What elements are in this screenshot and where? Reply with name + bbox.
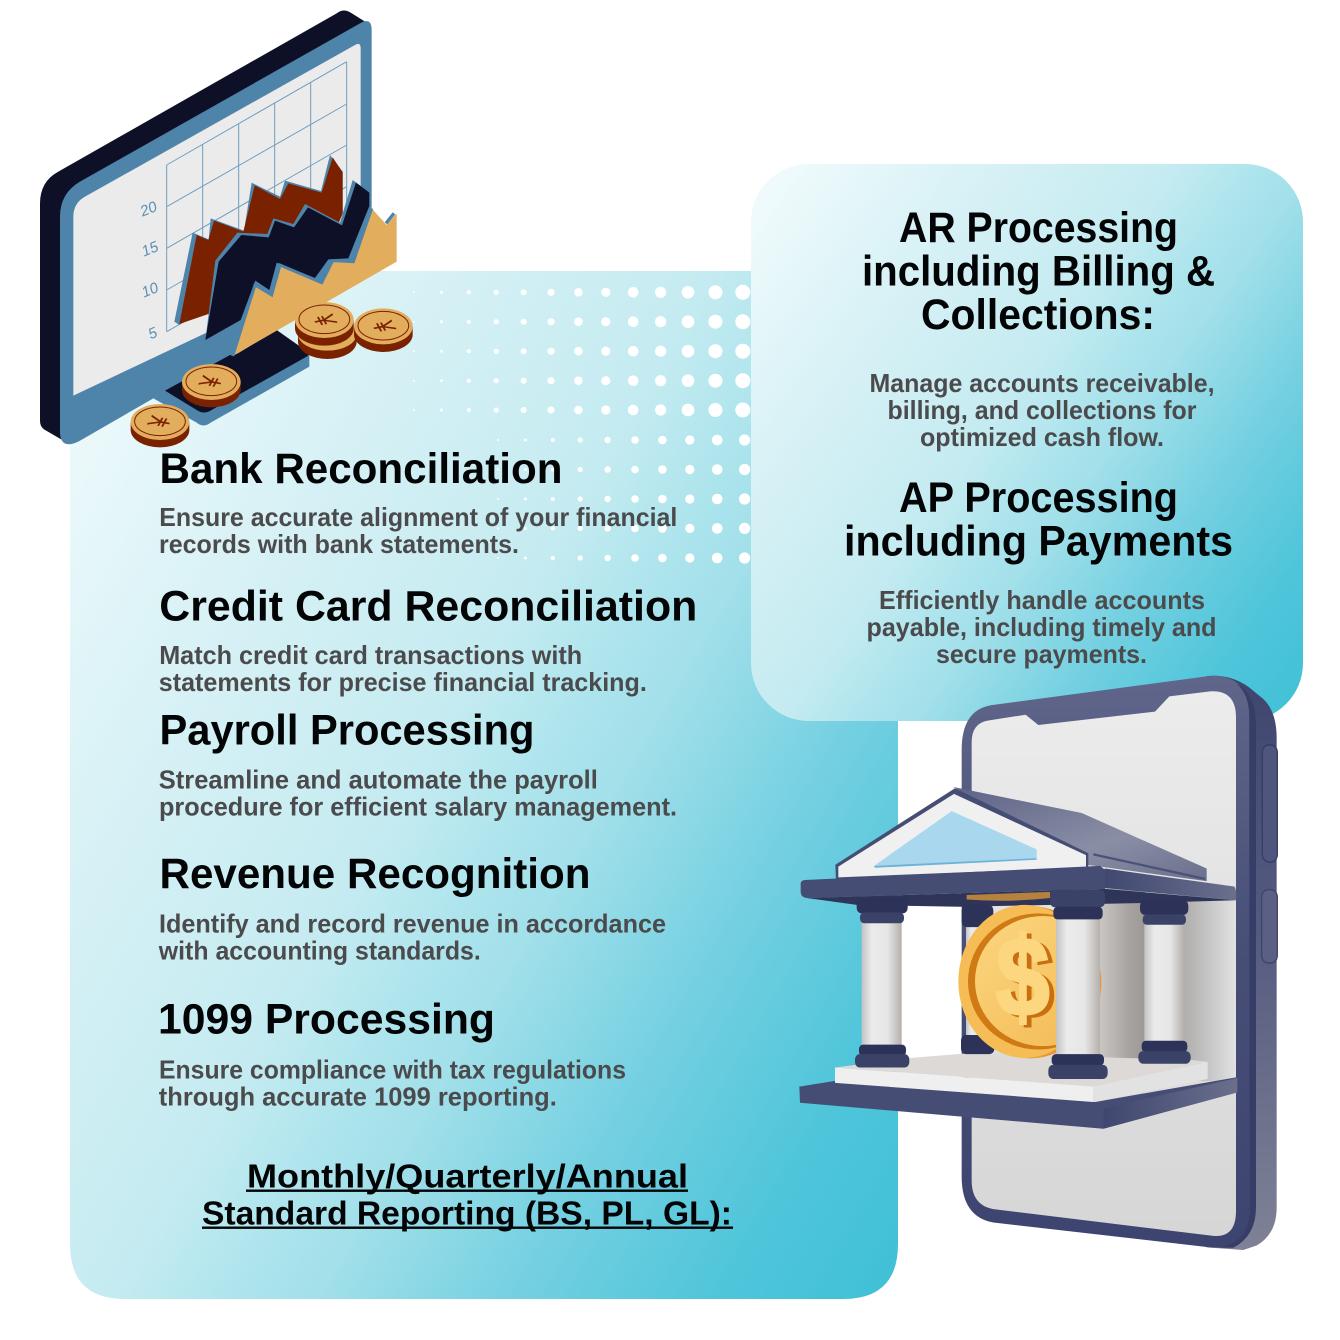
text block: 1099 Processing: through accurate 1099 reporting. [159,1082,557,1112]
text block: AP Processing: AP Processing [899,474,1178,522]
chart axis labels: 10 [139,279,162,301]
coin: ¥ [364,318,402,335]
text block: Payroll Processing: Payroll Processing [160,706,534,754]
text block: Credit Card Reconciliation: Match credit card transactions with [159,640,582,670]
text block: AP Processing: payable, including timely and [866,612,1216,642]
coin [131,404,189,447]
icon: phone with bank building and dollar coin [799,676,1277,1250]
monitor body [40,10,372,444]
phone body [962,676,1277,1250]
text block: Credit Card Reconciliation: Credit Card Reconciliation [159,582,697,630]
text block: standard reporting link: Standard Reporting (BS, PL, GL): [202,1194,732,1232]
text block: Payroll Processing [159,706,677,822]
text block: Credit Card Reconciliation: statements for precise financial tracking. [159,667,647,697]
text block: AR Processing: including Billing & [862,248,1215,296]
left column [855,898,909,1068]
icon: monitor with chart and coins [40,10,413,447]
phone screen [972,691,1236,1236]
text block: AR Processing: Collections: [921,291,1155,339]
chart axis labels: 5 [146,324,161,343]
chart: brown series [174,155,343,325]
text block: Revenue Recognition [158,850,666,966]
chart axis labels: 15 [139,238,162,260]
text block: standard reporting link [202,1158,733,1232]
coin stack [295,302,357,359]
text block: Payroll Processing: procedure for efficient salary management. [159,792,677,822]
text block: AR Processing: billing, and collections for [888,395,1196,425]
panel: main services background [70,271,898,1299]
text block: AP Processing: secure payments. [936,639,1147,669]
back column [961,905,994,1054]
text block: Credit Card Reconciliation [159,582,697,697]
chart: gold series [233,208,397,356]
bank roof [835,787,1207,881]
text block: Bank Reconciliation: Ensure accurate alignment of your financial [159,502,677,532]
text block: Bank Reconciliation [159,445,677,559]
text block: AR Processing: optimized cash flow. [920,422,1164,452]
dollar coin: $ [1000,918,1054,1042]
chart grid [167,62,347,332]
text block: AP Processing: Efficiently handle accounts [879,585,1205,615]
text block: 1099 Processing: 1099 Processing [158,996,495,1044]
text block: AR Processing: Manage accounts receivable, [870,368,1214,398]
floor slab [799,1053,1237,1129]
chart axis labels [137,198,162,343]
coin: ¥ [192,373,231,391]
coin [354,308,413,352]
text block: Revenue Recognition: Revenue Recognition [160,850,590,898]
panel: AR and AP background [751,164,1303,721]
text block: AR Processing: AR Processing [899,204,1178,252]
right column [1138,900,1191,1064]
halftone dot pattern [413,285,750,564]
front column [1048,890,1108,1079]
text block: 1099 Processing [158,996,626,1112]
coin [182,364,241,407]
text block: Bank Reconciliation: records with bank statements. [159,529,519,559]
text block: Revenue Recognition: Identify and record revenue in accordance [159,908,666,938]
text block: Bank Reconciliation: Bank Reconciliation [160,445,562,493]
monitor stand [153,330,309,425]
dollar coin: $ [996,916,1050,1040]
coin stack: ¥ [305,311,343,329]
text block: AP Processing: including Payments [844,518,1233,566]
dollar coin [958,905,1111,1058]
bank top plate [801,866,1236,907]
text block: standard reporting link: Monthly/Quarterly/Annual [247,1158,688,1194]
chart axis labels: 20 [137,198,160,221]
text block: AR Processing [862,204,1215,452]
text block: 1099 Processing: Ensure compliance with tax regulations [159,1054,626,1084]
text block: AP Processing [844,474,1233,669]
text block: Revenue Recognition: with accounting standards. [158,936,481,966]
coin: ¥ [141,413,179,431]
text block: Payroll Processing: Streamline and automate the payroll [159,764,598,794]
bank interior shadow [1100,886,1236,1081]
chart: navy series [205,180,370,340]
